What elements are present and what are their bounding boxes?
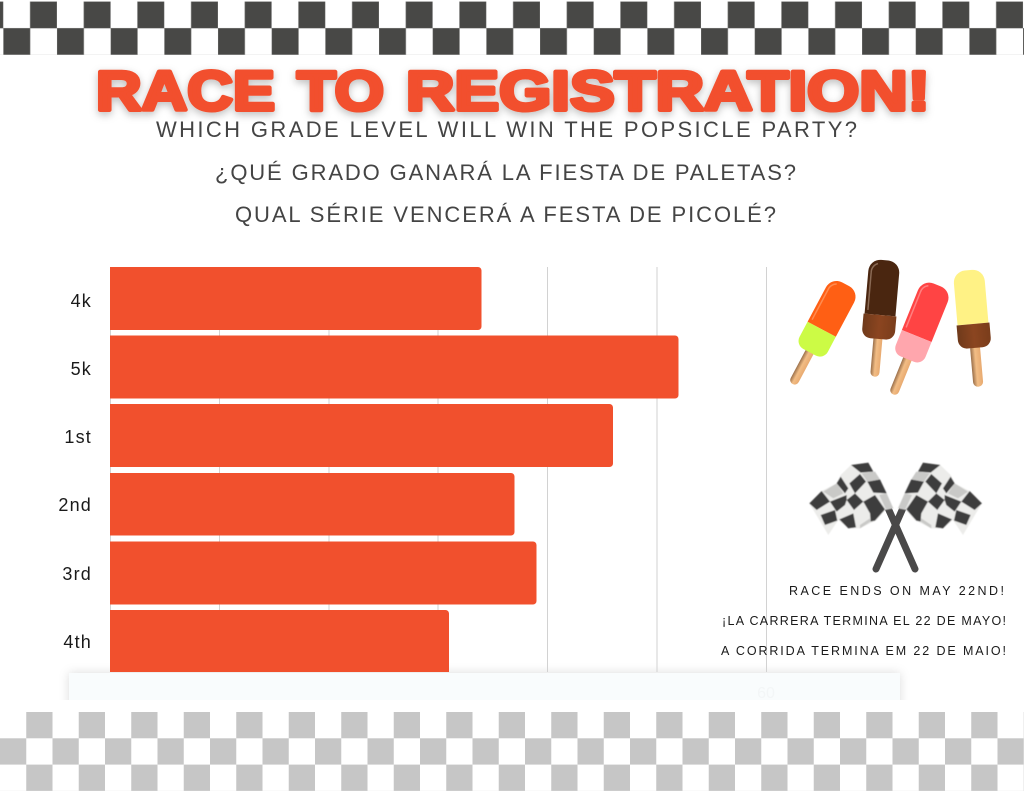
title bbox=[96, 59, 930, 122]
bar: 3rd bbox=[110, 542, 536, 604]
chart grid lines bbox=[110, 267, 766, 672]
popsicle: orange and lime bbox=[778, 277, 860, 392]
title: REGISTRATION! bbox=[406, 59, 930, 122]
popsicle: red and pink bbox=[878, 279, 952, 400]
faint axis value: 60 bbox=[757, 685, 775, 702]
top checkered banner bbox=[0, 2, 1024, 55]
popsicle: chocolate bbox=[858, 259, 901, 378]
label: 4k: 4k bbox=[71, 291, 92, 311]
date: Spanish: ¡LA CARRERA TERMINA EL 22 DE MAYO! bbox=[722, 614, 1006, 628]
subtitle: Spanish: ¿QUÉ GRADO GANARÁ LA FIESTA DE PALETAS? bbox=[215, 160, 796, 185]
bar: 2nd bbox=[110, 473, 514, 536]
date: English: RACE ENDS ON MAY 22ND! bbox=[789, 584, 1004, 598]
bar: 1st bbox=[110, 404, 613, 467]
popsicle: vanilla and chocolate bbox=[952, 269, 995, 388]
subtitle questions bbox=[156, 117, 857, 227]
bars bbox=[110, 267, 678, 672]
left flag bbox=[809, 463, 893, 535]
icon: popsicles bbox=[778, 259, 995, 400]
bottom checkered banner bbox=[0, 712, 1024, 791]
date: Portuguese: A CORRIDA TERMINA EM 22 DE MAIO! bbox=[721, 644, 1006, 658]
bar: 4th bbox=[110, 610, 449, 672]
bar: 5k bbox=[110, 336, 678, 398]
icon: crossed checkered flags bbox=[809, 463, 982, 569]
label: 1st: 1st bbox=[64, 427, 92, 447]
label: 2nd: 2nd bbox=[58, 495, 92, 515]
label: 5k: 5k bbox=[71, 359, 92, 379]
flag poles bbox=[876, 508, 915, 569]
pale axis panel bbox=[69, 673, 900, 713]
title: RACE bbox=[96, 59, 275, 122]
category labels bbox=[58, 291, 92, 652]
title: TO bbox=[297, 59, 384, 122]
label: 3rd: 3rd bbox=[62, 564, 92, 584]
white band under panel bbox=[0, 700, 1024, 791]
race end dates bbox=[721, 584, 1006, 658]
right flag bbox=[898, 463, 982, 535]
subtitle: Portuguese: QUAL SÉRIE VENCERÁ A FESTA DE PICOLÉ? bbox=[235, 202, 776, 227]
label: 4th: 4th bbox=[63, 632, 92, 652]
bar: 4k bbox=[110, 267, 482, 330]
subtitle: English: WHICH GRADE LEVEL WILL WIN THE POPSICLE PARTY? bbox=[156, 117, 857, 142]
bar chart bbox=[58, 267, 766, 672]
